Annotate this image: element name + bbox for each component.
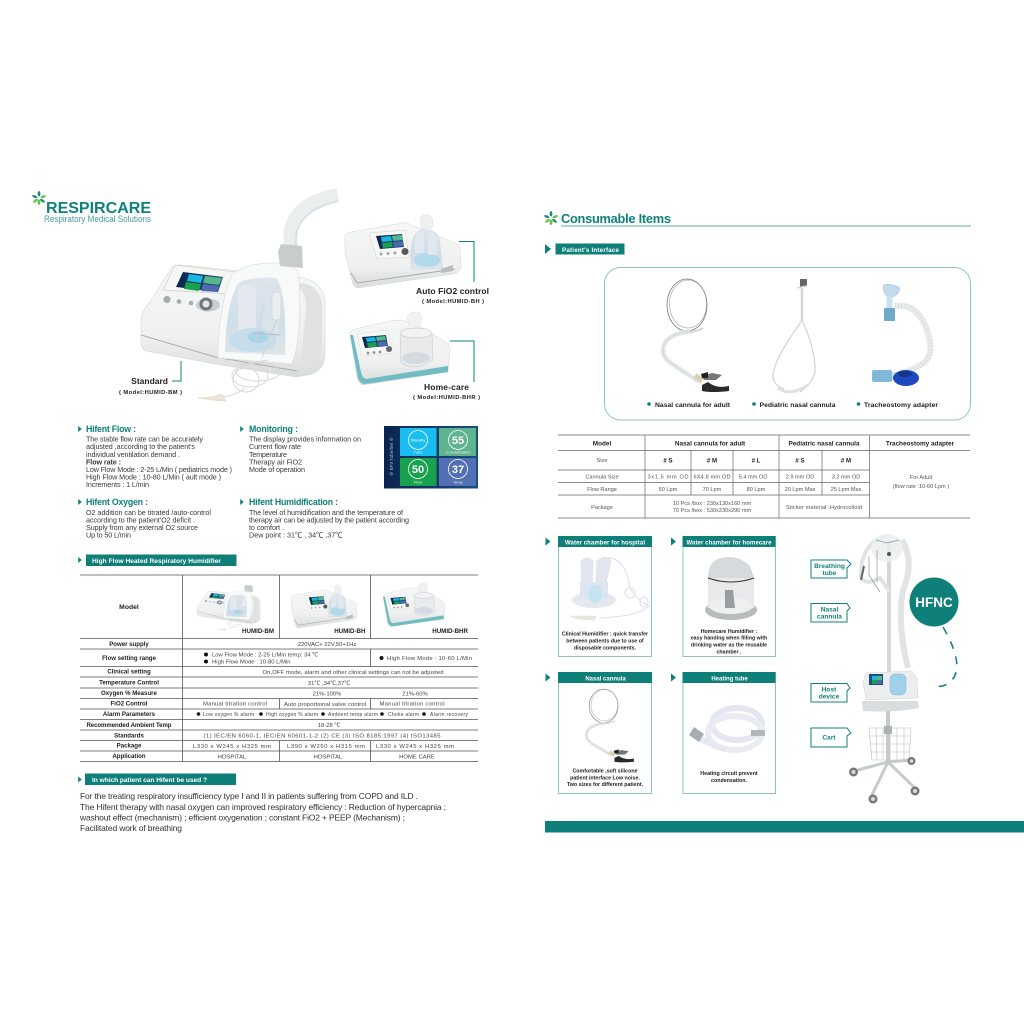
table: humidifier specifications: HUMID-BM xyxy=(242,628,274,635)
table: consumable specifications: Package xyxy=(591,505,613,511)
text block: Hifent Flow: individual ventilation demand . xyxy=(86,450,180,459)
text block: Hifent Flow: Flow rate : xyxy=(86,458,121,466)
main device: standard model xyxy=(141,195,338,401)
card: water chamber for hospital: Clinical Humidifier : quick transfer xyxy=(562,632,648,638)
label: Auto FiO2 control: Auto FiO2 control xyxy=(416,286,489,296)
badge: HFNC with dashed arc xyxy=(910,578,958,686)
table: humidifier specifications: HOSPITAL xyxy=(218,754,247,760)
table: consumable specifications: Model xyxy=(593,440,611,448)
table: humidifier specifications: Temperature Control xyxy=(99,680,159,686)
product labels: Tracheostomy adapter xyxy=(864,402,938,409)
table: consumable specifications: 70 Pcs /box : 530x230x290 mm xyxy=(673,508,752,514)
card: heating tube xyxy=(671,672,776,794)
table: humidifier specifications: Low oxygen % alarm xyxy=(203,712,254,718)
text block: Monitoring: Current flow rate xyxy=(249,442,301,451)
banner: Patient's Interface: Patient's Interface xyxy=(562,247,620,254)
card: water chamber for homecare: Water chamber for homecare xyxy=(686,540,772,546)
label: Home-care: Home-care xyxy=(424,382,469,392)
banner: High Flow Heated Respiratory Humidifier xyxy=(78,554,236,566)
card: nasal cannula xyxy=(546,672,652,794)
table: humidifier specifications: High oxygen % alarm xyxy=(266,712,318,718)
callout: Host device: Host xyxy=(822,686,837,694)
card: nasal cannula: Comfortable ,soft silicone xyxy=(572,768,638,774)
label: Standard: ( Model:HUMID-BM ) xyxy=(119,390,182,396)
table: humidifier specifications xyxy=(80,575,478,762)
text block: Hifent Humidification: to comfort . xyxy=(249,523,284,532)
card: water chamber for hospital: between patients due to use of xyxy=(566,638,644,644)
screen panel: 50 xyxy=(412,464,424,476)
text block: Hifent Oxygen: Up to 50 L/min xyxy=(86,530,131,540)
badge: HFNC with dashed arc: HFNC xyxy=(915,595,953,610)
table: humidifier specifications: Alarm recovery xyxy=(430,712,468,718)
banner: In which patient can Hifent be used xyxy=(78,774,236,785)
logo: RESPIRCARE xyxy=(46,200,151,217)
label: Standard: Standard xyxy=(131,376,168,386)
table: humidifier specifications: L390 x W250 x H315 mm xyxy=(287,744,365,750)
text block: Monitoring: The display provides information on xyxy=(249,434,361,444)
card: nasal cannula: Nasal cannula xyxy=(585,676,626,682)
table: consumable specifications: (flow rate :10-60 Lpm ) xyxy=(893,484,949,490)
logo xyxy=(32,191,151,225)
text block: Monitoring: Mode of operation xyxy=(249,465,305,474)
table: consumable specifications: 6X4.8 mm OD xyxy=(694,474,730,480)
text block: Hifent Oxygen xyxy=(78,497,211,540)
callout: Host device xyxy=(811,684,850,702)
device: Auto FiO2 control model xyxy=(345,215,461,288)
paragraph: patient usage: The Hifent therapy with nasal oxygen can improved respiratory efficiency : Reduction of hypercapnia ; xyxy=(80,802,446,812)
screen panel: Standby xyxy=(411,438,425,442)
table: humidifier specifications: HUMID-BH xyxy=(334,628,366,635)
table: humidifier specifications: (1) IEC/EN 6060-1, IEC/EN 60601-1-2 (2) CE (3) ISO 8185:1997 (4) ISO13485 xyxy=(204,734,441,740)
table: consumable specifications: 80 Lpm xyxy=(747,487,766,493)
table: humidifier specifications: Manual titration control xyxy=(203,702,267,708)
table: consumable specifications: 50 Lpm xyxy=(659,487,678,493)
table: humidifier specifications: Clinical setting xyxy=(107,668,151,676)
text block: Hifent Flow: Low Flow Mode : 2-25 L/Min ( pediatrics mode ) xyxy=(86,465,232,474)
table: consumable specifications: # S xyxy=(795,458,805,464)
table: consumable specifications: 25 Lpm Max xyxy=(831,487,862,493)
table: humidifier specifications: L330 x W245 x H325 mm xyxy=(376,744,454,750)
table: humidifier specifications: Application xyxy=(112,753,146,760)
table: humidifier specifications: Alarm Parameters xyxy=(103,711,156,718)
heading: Consumable Items: Consumable Items xyxy=(561,211,671,226)
banner: In which patient can Hifent be used: In which patient can Hifent be used ? xyxy=(92,777,207,784)
table: humidifier specifications: Flow setting range xyxy=(102,655,157,662)
card: heating tube: Heating circuit prevent xyxy=(700,771,758,777)
screen panel: Concentration xyxy=(446,450,470,454)
label: Auto FiO2 control xyxy=(416,242,489,305)
table: consumable specifications: Flow Range xyxy=(587,487,617,493)
screen panel: 37 xyxy=(452,464,464,476)
table: humidifier specifications: Model xyxy=(119,604,139,611)
card: water chamber for hospital: disposable components. xyxy=(574,646,637,652)
card: water chamber for homecare: easy handing when filling with xyxy=(691,636,767,642)
screen panel: Temp xyxy=(453,480,464,484)
table: humidifier specifications: 18-28 ℃ xyxy=(318,722,340,729)
table: humidifier specifications: Standards xyxy=(114,732,145,740)
text block: Monitoring: Temperature xyxy=(249,450,287,459)
table: consumable specifications: 3.2 mm OD xyxy=(832,474,860,480)
table: humidifier specifications: Auto proportional valve control xyxy=(284,702,366,708)
table: humidifier specifications: Manual titration control xyxy=(380,702,444,708)
illustration: HFNC cart system xyxy=(849,534,920,804)
table: consumable specifications: Cannula Size xyxy=(585,474,619,480)
table: consumable specifications: 70 Lpm xyxy=(703,487,722,493)
table: humidifier specifications: L330 x W245 x H325 mm xyxy=(193,744,271,750)
label: Standard xyxy=(119,361,182,396)
text block: Hifent Oxygen: Supply from any external O2 source xyxy=(86,523,198,532)
text block: Hifent Flow: The stable flow rate can be accurately xyxy=(86,434,203,444)
screen panel: Tube xyxy=(414,450,423,454)
table: humidifier specifications: 21%-100% xyxy=(313,692,342,698)
table: consumable specifications: Sticker material :Hydrocolloid xyxy=(786,505,862,511)
table: humidifier specifications: High Flow Mode : 10-60 L/Min xyxy=(387,656,472,662)
callout: Cart xyxy=(811,728,851,747)
heading: Consumable Items xyxy=(544,211,971,226)
icon: pediatric nasal cannula xyxy=(773,279,815,392)
text block: Monitoring: Therapy air FiO2 xyxy=(249,458,302,466)
label: Home-care: ( Model:HUMID-BHR ) xyxy=(413,395,480,401)
device: Home-care model xyxy=(350,312,450,385)
screen panel: Flow xyxy=(414,480,422,484)
table: humidifier specifications: 31℃ ,34℃,37℃ xyxy=(308,680,350,687)
table: humidifier specifications: 220VAC+ 22V,50+1Hz xyxy=(298,642,356,648)
text block: Hifent Humidification: therapy air can be adjusted by the patient according xyxy=(249,516,409,524)
table: humidifier specifications: FiO2 Control xyxy=(111,700,148,708)
table: consumable specifications: # M xyxy=(707,458,717,464)
table: humidifier specifications: HOME CARE xyxy=(399,754,435,760)
table: consumable specifications xyxy=(558,435,970,518)
card: water chamber for hospital xyxy=(546,536,652,656)
table: humidifier specifications: On,OFF mode, alarm and other clinical settings can not be adjusted xyxy=(262,670,444,676)
banner: High Flow Heated Respiratory Humidifier: High Flow Heated Respiratory Humidifier xyxy=(92,558,221,565)
text block: Hifent Flow: High Flow Mode : 10-80 L/Min ( ault mode ) xyxy=(86,472,221,482)
screen panel: ⊕ BF3 Tube/Set ⊕ xyxy=(389,437,394,476)
product labels: Pediatric nasal cannula xyxy=(760,402,836,409)
table: humidifier specifications: Oxygen % Measure xyxy=(101,690,158,697)
callout: Breathing tube xyxy=(811,560,851,578)
table: humidifier specifications: Ambient temp alarm xyxy=(328,712,378,718)
card: heating tube: Heating tube xyxy=(711,676,748,682)
card: heating tube: condensation. xyxy=(711,778,747,784)
callout: Breathing tube: tube xyxy=(823,570,837,577)
table: humidifier specifications: Package xyxy=(117,742,142,750)
table: humidifier specifications: High Flow Mode : 10-80 L/Min xyxy=(212,660,291,666)
text block: Monitoring xyxy=(240,424,361,474)
table: humidifier specifications: Low Flow Mode : 2-25 L/Min temp: 34 ℃ xyxy=(212,652,318,658)
table: humidifier specifications: Choke alarm xyxy=(388,712,419,718)
callout: Breathing tube: Breathing xyxy=(814,563,845,570)
table: consumable specifications: 3x1.5 mm OD xyxy=(648,474,688,480)
product labels xyxy=(647,402,938,409)
table: humidifier specifications: HUMID-BHR xyxy=(432,628,469,635)
table: humidifier specifications: 21%-60% xyxy=(402,692,429,698)
panel: patient interface products xyxy=(604,268,970,420)
card: nasal cannula: Two sizes for different patient. xyxy=(567,782,644,788)
footer bar xyxy=(545,821,1024,832)
table: humidifier specifications: HOSPITAL xyxy=(314,754,343,760)
table: consumable specifications: Tracheostomy adapter xyxy=(886,440,955,448)
table: consumable specifications: # M xyxy=(841,458,851,464)
banner: Patient's Interface xyxy=(545,244,624,254)
table: consumable specifications: Size xyxy=(597,458,607,464)
text block: Monitoring: Monitoring : xyxy=(249,424,298,434)
text block: Hifent Oxygen: O2 addition can be titrated /auto-control xyxy=(86,508,211,517)
screen panel xyxy=(384,426,478,488)
icon: tracheostomy adapter xyxy=(872,284,930,386)
card: water chamber for homecare: chamber . xyxy=(716,650,742,656)
paragraph: patient usage: For the treating respiratory insufficiency type I and II in patients suffering from COPD and ILD . xyxy=(80,791,418,801)
table: consumable specifications: 20 Lpm Max xyxy=(785,487,816,493)
paragraph: patient usage: Facilitated work of breathing xyxy=(80,823,182,833)
table: consumable specifications: # S xyxy=(663,458,673,464)
card: water chamber for homecare: drinking water as the reusable xyxy=(691,642,767,648)
table: consumable specifications: Nasal cannula for adult xyxy=(675,440,746,448)
text block: Hifent Oxygen: according to the patient'O2 deficit . xyxy=(86,516,195,524)
callout: Cart: Cart xyxy=(822,734,836,742)
table: consumable specifications: 10 Pcs /box : 230x130x160 mm xyxy=(673,501,752,507)
card: water chamber for homecare: Homecare Humidifier : xyxy=(701,629,757,635)
callout: Nasal cannula: Nasal xyxy=(821,606,838,614)
text block: Hifent Flow: Increments : 1 L/min xyxy=(86,480,149,489)
icon: adult nasal cannula xyxy=(663,279,729,392)
screen panel: 55 xyxy=(452,435,464,447)
text block: Hifent Flow xyxy=(78,424,232,489)
label: Home-care xyxy=(413,341,480,401)
text block: Hifent Humidification: The level of humidification and the temperature of xyxy=(249,508,403,517)
logo: Respiratory Medical Solutions xyxy=(44,214,151,225)
card: water chamber for hospital: Water chamber for hospital xyxy=(565,540,645,546)
callout: Host device: device xyxy=(819,694,840,700)
text block: Hifent Humidification: Hifent Humidification : xyxy=(249,497,338,507)
callout: Nasal cannula: cannula xyxy=(817,614,842,620)
table: consumable specifications: For Adult xyxy=(910,475,933,481)
paragraph: patient usage: washout effect (mechanism) ; efficient oxygenation ; constant FiO2 + PEEP (Mechanism) ; xyxy=(79,812,405,822)
text block: Hifent Humidification: Dew point : 31℃ , 34℃ ,37℃ xyxy=(249,530,342,540)
text block: Hifent Flow: adjusted ,according to the patient's xyxy=(86,442,195,451)
product labels: Nasal cannula for adult xyxy=(655,402,731,409)
card: nasal cannula: patient interface Low noise. xyxy=(570,776,640,782)
table: humidifier specifications: Power supply xyxy=(109,641,149,648)
callout: Nasal cannula xyxy=(811,604,850,622)
table: consumable specifications: Pediatric nasal cannula xyxy=(788,440,860,448)
table: humidifier specifications: Recommended Ambient Temp xyxy=(86,722,172,729)
table: consumable specifications: 2.9 mm OD xyxy=(786,474,814,480)
text block: Hifent Flow: Hifent Flow : xyxy=(86,424,136,434)
card: water chamber for homecare xyxy=(671,536,776,656)
text block: Hifent Humidification xyxy=(240,497,409,540)
table: consumable specifications: # L xyxy=(752,458,761,464)
table: consumable specifications: 5.4 mm OD xyxy=(739,474,767,480)
text block: Hifent Oxygen: Hifent Oxygen : xyxy=(86,497,148,507)
paragraph: patient usage xyxy=(79,791,446,833)
label: Auto FiO2 control: ( Model:HUMID-BH ) xyxy=(422,299,484,305)
